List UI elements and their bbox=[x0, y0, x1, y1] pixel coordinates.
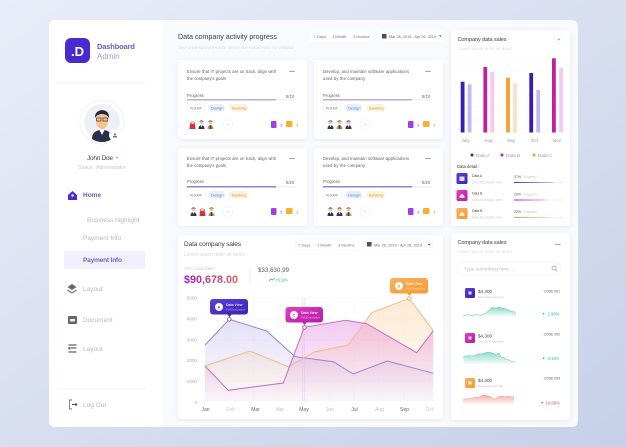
expand button: + bbox=[558, 37, 561, 43]
chart heading bbox=[184, 241, 245, 258]
list item 3: CODE 003 bbox=[544, 376, 560, 380]
detail row B bbox=[456, 190, 563, 202]
x axis: Aug bbox=[375, 407, 384, 413]
x axis: Oct bbox=[426, 407, 434, 413]
grid bbox=[204, 298, 434, 401]
list heading: ... bbox=[555, 240, 561, 247]
bar panel heading: Company data sales bbox=[458, 37, 507, 43]
y axis: 4000 bbox=[187, 316, 197, 322]
panel: task card 1: the company's goals bbox=[187, 76, 226, 81]
panel: task card 2: ... bbox=[425, 67, 431, 74]
panel: company sales chart bbox=[178, 235, 443, 419]
x axis: May bbox=[299, 407, 309, 413]
panel: task card 4: Design bbox=[348, 192, 360, 198]
detail row A: Targeted bbox=[523, 175, 537, 179]
panel: sidebar bbox=[49, 20, 163, 427]
y axis: 3000 bbox=[187, 338, 197, 342]
list item 1 bbox=[463, 288, 560, 317]
legend: Data B bbox=[506, 153, 520, 158]
date picker: sales: Mar 26, 2019 - Apr 26, 2019 bbox=[374, 244, 422, 248]
tooltip C: Full Description bbox=[301, 316, 321, 320]
detail row B: Targeted bbox=[523, 192, 537, 196]
total sales bbox=[184, 266, 238, 286]
x axis bbox=[201, 407, 434, 413]
date picker: activity bbox=[378, 31, 444, 42]
tooltip A: Full Description bbox=[226, 308, 246, 312]
marker line: May bbox=[302, 298, 304, 401]
detail row A bbox=[456, 173, 563, 184]
panel: task card 4: 3 bbox=[417, 210, 420, 214]
search box: Type something here ... bbox=[464, 266, 514, 272]
secondary amount: $33,630,99 bbox=[258, 268, 290, 274]
range tabs: activity: 3 Months bbox=[353, 34, 369, 39]
nav: layout 2: Layout bbox=[83, 346, 103, 353]
x axis: Mar bbox=[251, 407, 260, 413]
logo bbox=[65, 38, 90, 63]
nav: home bbox=[68, 191, 101, 200]
y axis: 0 bbox=[194, 400, 197, 405]
detail row A: Data description here bbox=[472, 180, 503, 184]
panel: task card 4: ... bbox=[425, 154, 431, 161]
detail row C: Data description here bbox=[472, 216, 503, 220]
grid bbox=[458, 58, 565, 132]
nav: payment info: Payment Info bbox=[83, 235, 122, 242]
detail row B: 20% bbox=[514, 192, 521, 196]
panel: task card 2: Design bbox=[348, 106, 360, 110]
tooltip B bbox=[390, 278, 428, 300]
avatar: John Doe bbox=[80, 100, 124, 144]
area: orange bbox=[205, 298, 433, 401]
list item 3: Estimated earnings bbox=[478, 384, 504, 388]
panel: task card 4 bbox=[314, 148, 443, 226]
x axis: Jan bbox=[201, 407, 210, 413]
panel: task card 2: used by the company bbox=[323, 76, 366, 81]
range tabs: sales: 7 Days bbox=[298, 242, 310, 248]
bar labels: Nov bbox=[553, 138, 562, 143]
range tabs: sales: 3 Months bbox=[338, 242, 354, 248]
panel: task card 3: Ensure that IT projects are on track, align with bbox=[187, 156, 277, 161]
search box bbox=[457, 262, 561, 275]
x axis: Apr bbox=[276, 407, 284, 413]
log out bbox=[70, 400, 106, 409]
list item 1: $4,300 bbox=[478, 289, 492, 294]
panel: task card 2: #UXKIF bbox=[326, 106, 338, 110]
date picker: sales bbox=[363, 239, 433, 250]
secondary amount bbox=[258, 268, 290, 282]
range tabs: sales bbox=[295, 239, 359, 250]
legend: Data A bbox=[476, 153, 491, 158]
panel: task card 2: 3 bbox=[417, 122, 420, 128]
list heading: Company data sales bbox=[458, 240, 507, 246]
dashboard container bbox=[49, 20, 578, 427]
panel: task card 1: Progress bbox=[187, 93, 204, 98]
panel: task card 1: Ensure that IT projects are on track, align with bbox=[187, 69, 277, 74]
tooltip A: Data View bbox=[226, 303, 243, 307]
panel: task card 3: 8/10 bbox=[286, 180, 295, 185]
panel: task card 4: #UXKIF bbox=[326, 194, 338, 198]
bar labels: July bbox=[461, 138, 470, 143]
logo: .D bbox=[71, 44, 84, 59]
panel: task card 4: Banking bbox=[369, 192, 383, 198]
chart heading: Lorem ipsum dolor sit amet bbox=[184, 252, 245, 258]
area: purple bbox=[205, 319, 433, 401]
list item 2: Estimated earnings bbox=[478, 340, 504, 344]
tooltip C: C bbox=[293, 312, 296, 318]
panel: task card 4: Develop, and maintain software applications bbox=[323, 156, 409, 161]
section heading: activity progress: Sed ut perspiciatis unde omnis iste natus error sit voluptat bbox=[178, 45, 295, 50]
legend bbox=[470, 153, 553, 158]
nav: layout 2 bbox=[68, 345, 103, 353]
bar labels: Sep bbox=[507, 138, 516, 143]
tooltip B: B bbox=[398, 284, 401, 288]
panel: task card 3: Progress bbox=[187, 179, 204, 184]
bar labels: Oct bbox=[531, 138, 539, 143]
panel: task card 1: 3 bbox=[296, 122, 299, 128]
detail row C: Data B bbox=[472, 209, 483, 213]
panel: task card 2 bbox=[314, 60, 443, 139]
nav: business highlight: Business highlight bbox=[87, 217, 140, 224]
y axis: 5000 bbox=[187, 296, 197, 300]
expand button bbox=[554, 34, 564, 44]
line: magenta bbox=[205, 320, 433, 390]
panel: task card 3: 3 bbox=[296, 210, 299, 214]
legend: Data C bbox=[538, 153, 553, 158]
total sales: $90,678.00 bbox=[184, 274, 238, 286]
detail row B: Data description here bbox=[472, 198, 503, 202]
detail row A: Data A bbox=[472, 174, 483, 178]
nav: document: Document bbox=[83, 317, 113, 324]
user name and status bbox=[78, 155, 126, 171]
log out: Log Out bbox=[83, 402, 106, 409]
nav: layout: Layout bbox=[83, 286, 103, 293]
bar panel heading bbox=[458, 37, 513, 51]
list item 1: 2.98% bbox=[548, 312, 560, 316]
panel: task card 3: Design bbox=[211, 192, 223, 198]
nav: payment info active: Payment Info bbox=[83, 257, 122, 264]
detail row A: 37% bbox=[514, 175, 521, 179]
panel: company data list bbox=[451, 233, 570, 420]
list item 3: 10.09% bbox=[546, 400, 560, 406]
line: orange bbox=[205, 298, 433, 367]
y axis bbox=[187, 296, 197, 405]
panel: task card 4: + bbox=[364, 210, 367, 216]
panel: task card 2: 8/10 bbox=[422, 94, 431, 99]
bar chart bbox=[461, 58, 563, 132]
panel: task card 3: + bbox=[227, 210, 230, 216]
list item 1: CODE 001 bbox=[544, 290, 560, 294]
panel: task card 3: #UXKIF bbox=[190, 194, 202, 198]
nav: layout bbox=[68, 284, 103, 293]
detail row C bbox=[456, 208, 563, 220]
section heading: activity progress bbox=[178, 32, 295, 50]
brand name bbox=[97, 42, 135, 61]
panel: task card 3: ... bbox=[289, 154, 295, 161]
panel: task card 4: Progress bbox=[323, 179, 340, 184]
list item 2: CODE 002 bbox=[544, 332, 560, 336]
x axis: Jul bbox=[351, 407, 358, 413]
panel: company data sales bars bbox=[451, 30, 570, 226]
panel: task card 3: Banking bbox=[232, 192, 246, 198]
x axis: Feb bbox=[226, 407, 235, 413]
panel: task card 3: 3 bbox=[280, 210, 283, 214]
user name and status: John Doe bbox=[87, 155, 113, 162]
brand name: Dashboard bbox=[97, 42, 135, 51]
range tabs: activity: 7 Days bbox=[314, 34, 326, 39]
x axis: Sep bbox=[400, 407, 409, 413]
y axis: 2000 bbox=[187, 358, 197, 363]
range tabs: activity bbox=[310, 31, 373, 42]
range tabs: sales: 1 Month bbox=[317, 242, 331, 248]
list item 2: $4,300 bbox=[478, 334, 492, 338]
user name and status: Status : Administrator bbox=[78, 165, 126, 171]
date picker: activity: Mar 26, 2019 - Apr 26, 2019 bbox=[389, 35, 436, 39]
list item 2: 3.15% bbox=[548, 356, 560, 361]
tooltip C bbox=[286, 307, 323, 329]
panel: task card 1 bbox=[178, 60, 307, 139]
chart heading: Data company sales bbox=[184, 241, 242, 248]
data detail heading: Data detail : bbox=[457, 164, 479, 169]
list item 1: Estimated earnings bbox=[478, 295, 504, 299]
bar panel heading: Lorem ipsum dolor sit amet bbox=[458, 46, 513, 51]
panel: task card 2: Progress bbox=[323, 93, 340, 98]
tooltip B: Full Description bbox=[406, 286, 426, 290]
area: magenta bbox=[205, 320, 433, 401]
detail row B: Data B bbox=[472, 192, 483, 196]
list heading: Lorem ipsum dolor sit amet bbox=[458, 249, 513, 254]
bar labels: Aug bbox=[484, 138, 493, 143]
tooltip A: A bbox=[218, 304, 221, 310]
list heading bbox=[458, 240, 561, 254]
panel: task card 1: 8/10 bbox=[286, 94, 295, 99]
detail row C: Targeted bbox=[523, 210, 537, 214]
detail row C: 22% bbox=[514, 210, 521, 214]
section heading: activity progress: Data company activity progress bbox=[178, 32, 277, 41]
panel: task card 1: Design bbox=[211, 106, 223, 110]
panel: task card 2: + bbox=[364, 122, 367, 128]
nav: payment info active bbox=[64, 251, 145, 269]
list item 3 bbox=[463, 376, 560, 406]
brand name: Admin bbox=[97, 52, 120, 61]
bar labels bbox=[461, 138, 562, 143]
panel: task card 1: + bbox=[227, 122, 230, 128]
tooltip C: Data View bbox=[301, 311, 318, 315]
range tabs: activity: 1 Month bbox=[332, 34, 346, 39]
panel: task card 2: 3 bbox=[433, 122, 436, 128]
panel: task card 1: #UXKIF bbox=[190, 106, 202, 110]
panel: task card 4: used by the company bbox=[323, 163, 366, 168]
panel: task card 1: ... bbox=[289, 67, 295, 74]
list item 3: $4,300 bbox=[478, 378, 492, 383]
tooltip B: Data View bbox=[406, 282, 423, 286]
list item 2 bbox=[463, 332, 560, 364]
panel: task card 4: 3 bbox=[433, 210, 436, 214]
panel: task card 4: 8/10 bbox=[422, 180, 431, 185]
tooltip A bbox=[210, 299, 248, 321]
total sales: Your total sales bbox=[184, 266, 215, 271]
panel: task card 3: the company's goals bbox=[187, 163, 226, 168]
x axis: Jun bbox=[326, 407, 334, 413]
secondary amount: +5,9% bbox=[275, 278, 288, 282]
y axis: 1000 bbox=[187, 379, 197, 384]
nav: home: Home bbox=[83, 192, 101, 199]
line: purple bbox=[205, 319, 433, 374]
nav: document bbox=[68, 316, 113, 324]
panel: task card 2: Banking bbox=[369, 106, 383, 110]
panel: task card 1: Banking bbox=[232, 106, 246, 110]
panel: task card 3 bbox=[178, 148, 307, 226]
panel: task card 1: 3 bbox=[280, 122, 283, 128]
panel: task card 2: Develop, and maintain software applications bbox=[323, 69, 409, 74]
